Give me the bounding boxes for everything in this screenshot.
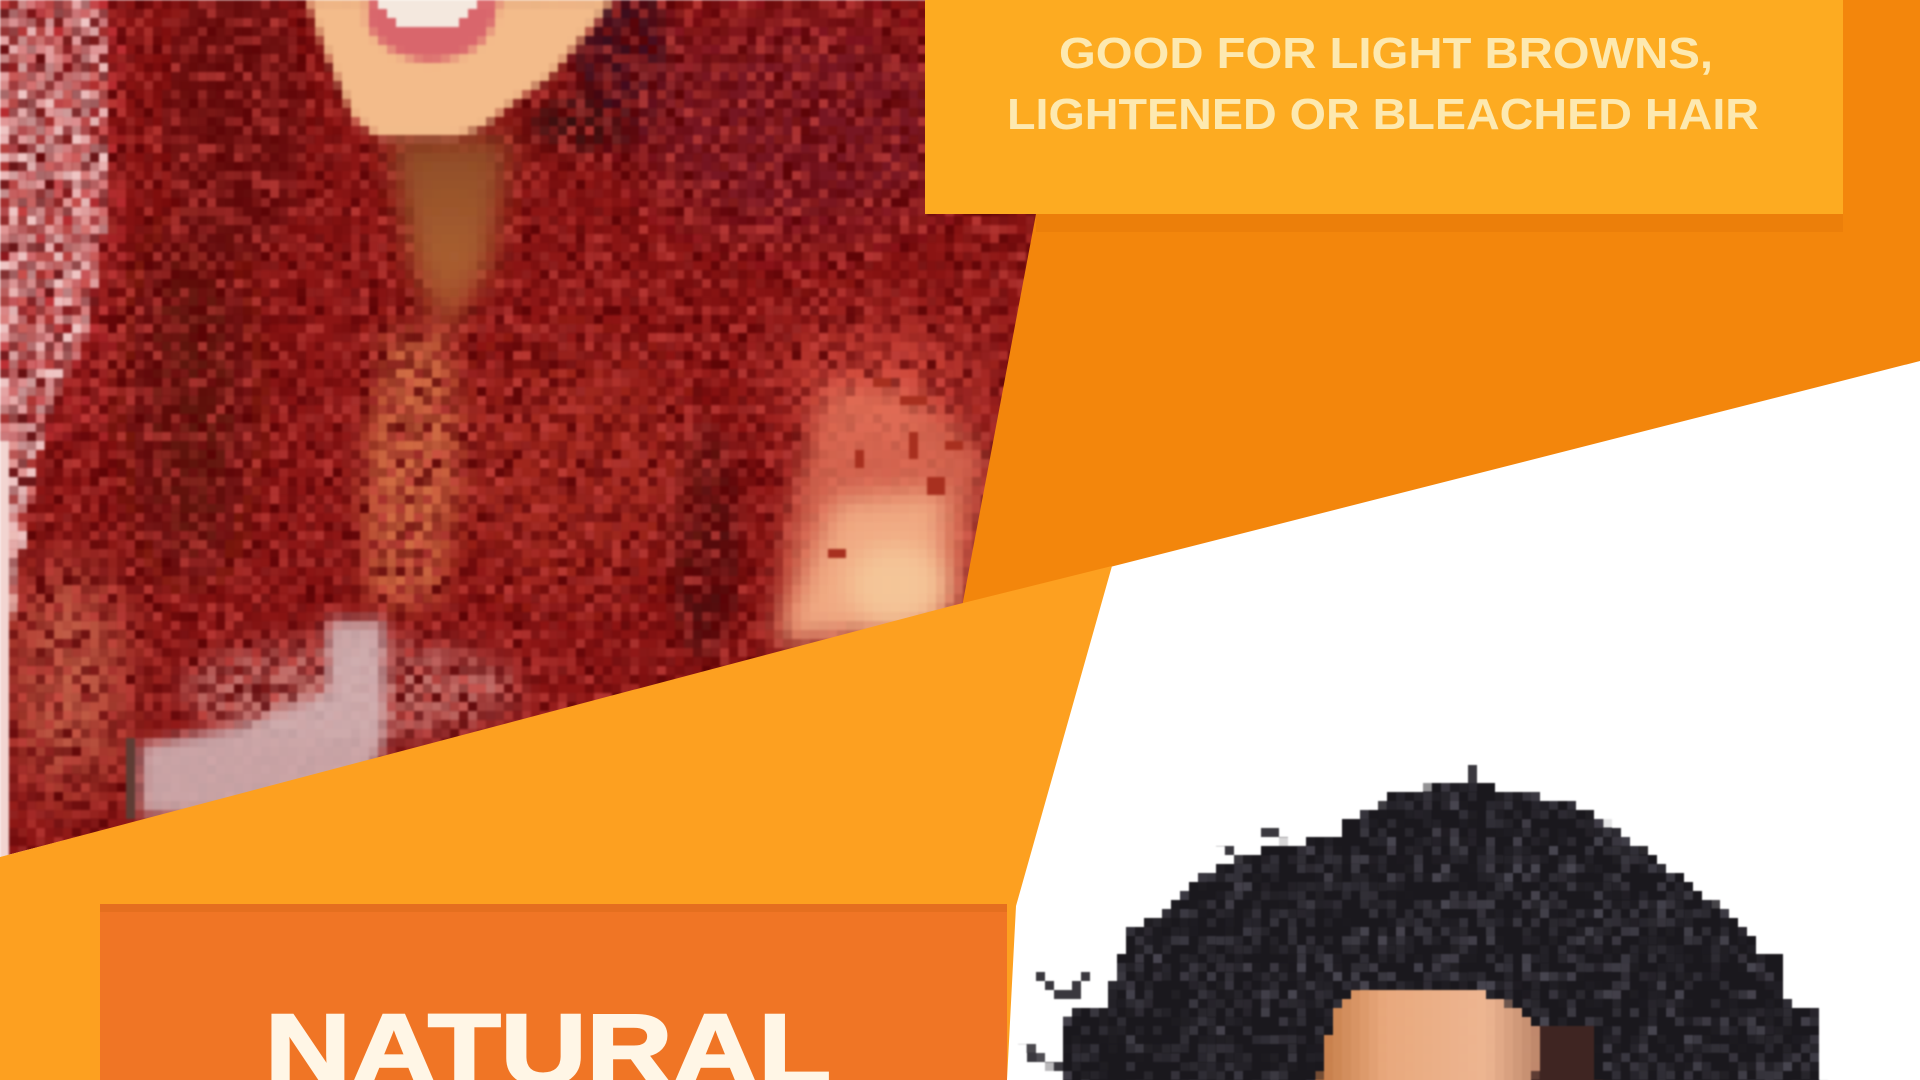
- text: hair suitability: [1007, 29, 1759, 139]
- stray curls: [1025, 768, 1472, 1065]
- arm highlight: [780, 490, 945, 640]
- speckled white background at left: [0, 0, 127, 622]
- hair noise texture: [0, 0, 1053, 873]
- curls over arm: [825, 382, 963, 554]
- black curly hair: [1050, 770, 1840, 1080]
- photo: woman with red curly hair: [0, 0, 1053, 873]
- mouth: [367, 0, 500, 62]
- text: hair suitability: LIGHTENED OR BLEACHED HAIR: [1007, 90, 1759, 139]
- neck: [390, 137, 510, 335]
- panel: orange label box: [100, 904, 1007, 1080]
- brown hair beside face: [1530, 1025, 1600, 1080]
- left edge: [0, 440, 9, 860]
- arm upper salmon: [775, 385, 985, 640]
- hair base: [0, 0, 1053, 873]
- dark strand: [124, 740, 137, 822]
- face and chin: [307, 0, 613, 137]
- forehead: [1318, 986, 1542, 1080]
- box shadow strip: [1036, 214, 1843, 232]
- panel: amber diagonal lower: [0, 566, 1112, 1080]
- shirt: [140, 620, 385, 815]
- chest: [362, 330, 462, 610]
- text: hair suitability: GOOD FOR LIGHT BROWNS,: [1059, 29, 1713, 78]
- photo: woman with black curly hair: [1000, 756, 1855, 1080]
- panel: dark orange diagonal background: [930, 0, 1920, 608]
- hair shadows and highlights: [15, 0, 985, 800]
- panel: amber text box top: [925, 0, 1843, 232]
